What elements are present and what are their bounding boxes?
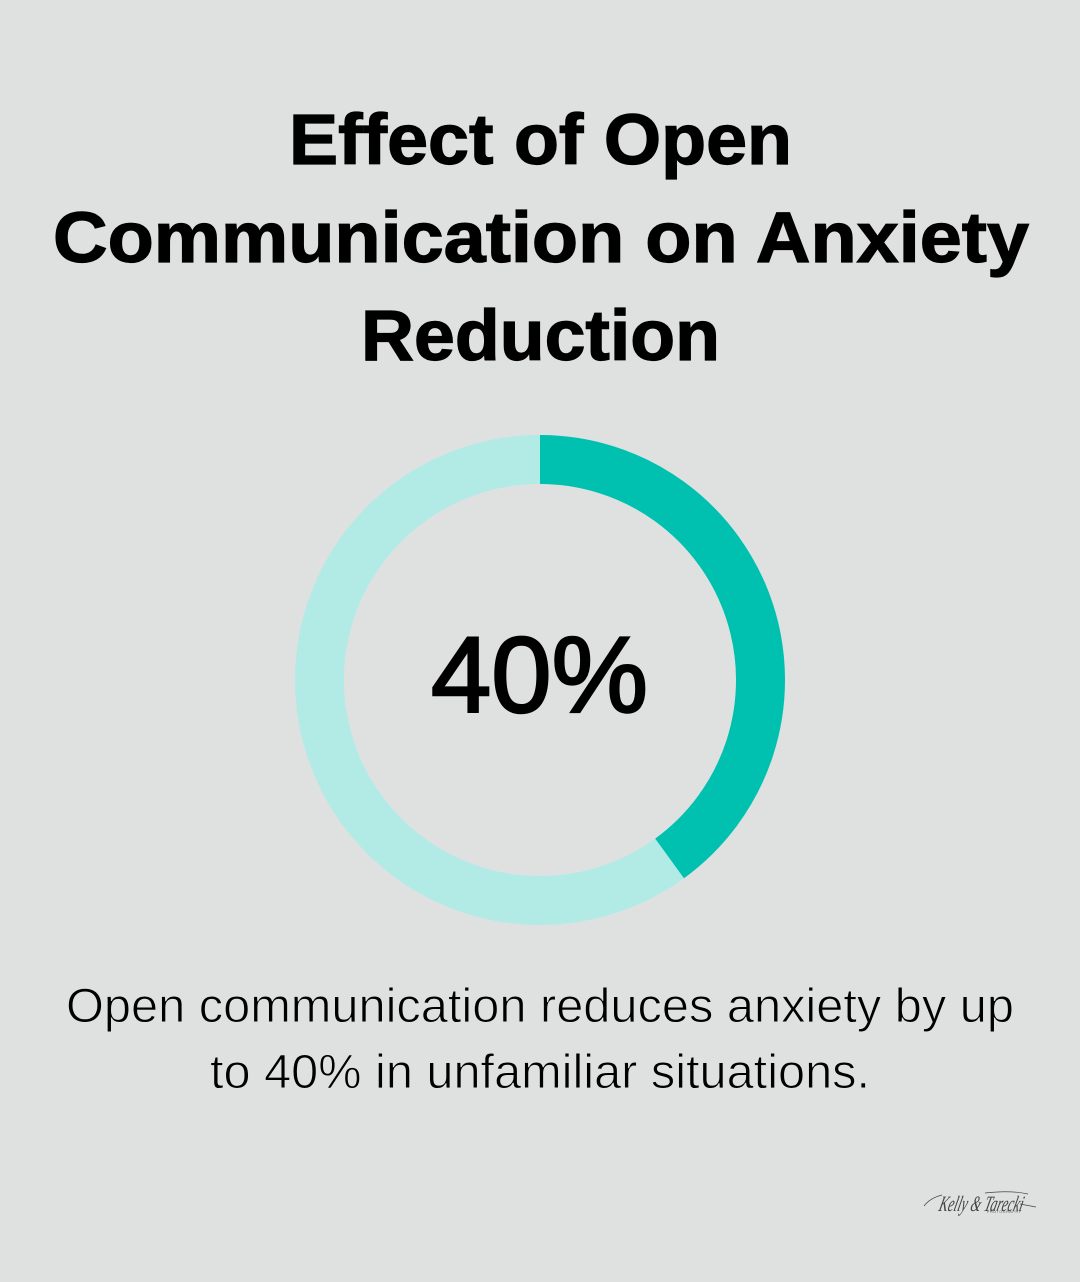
signature logo: PHOTOGRAPHY [987, 1210, 1022, 1214]
description text [66, 980, 1014, 1099]
description text: Open communication reduces anxiety by up [66, 980, 1014, 1033]
donut chart: 40% [320, 460, 761, 900]
signature logo: Kelly & Tarecki [936, 1191, 1027, 1216]
donut track [320, 460, 760, 900]
title: Reduction [361, 297, 720, 376]
title: Communication on Anxiety [53, 199, 1030, 278]
donut value arc [540, 460, 761, 858]
signature logo [924, 1191, 1036, 1216]
description text: to 40% in unfamiliar situations. [210, 1046, 870, 1099]
title [53, 101, 1030, 376]
title: Effect of Open [289, 101, 792, 180]
center value: 40% [431, 614, 648, 735]
